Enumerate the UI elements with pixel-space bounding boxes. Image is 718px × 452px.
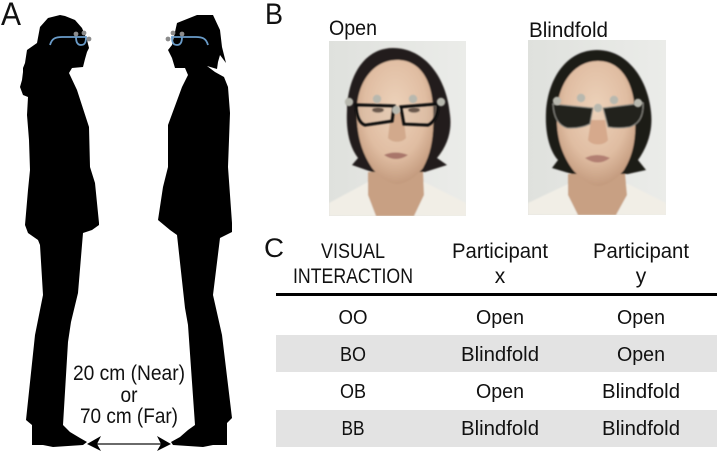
row: BB (276, 410, 717, 447)
photo: participant with blindfold glasses (528, 40, 666, 215)
table header: y (636, 265, 647, 288)
row: BO (276, 335, 717, 372)
row: BO: Open (617, 344, 665, 366)
row: OO (338, 307, 665, 329)
motion capture glasses: right participant (166, 31, 208, 45)
row: BB: Blindfold (602, 418, 680, 440)
photo: participant with clear glasses (329, 41, 466, 216)
motion capture glasses: left participant (50, 31, 91, 45)
row: OO: Open (476, 307, 524, 329)
row: OB (340, 381, 680, 403)
row: BO: Blindfold (461, 344, 539, 366)
distance label: or (120, 384, 138, 407)
distance label: 70 cm (Far) (80, 405, 178, 428)
table header: Participant (593, 240, 689, 263)
panel label C: C (264, 233, 284, 263)
caption: open: Open (329, 17, 377, 40)
double arrow: distance between participants (87, 436, 171, 451)
panel A: two standing participants (1, 0, 232, 451)
row: OO: Open (617, 307, 665, 329)
distance label (73, 362, 185, 428)
silhouette: left participant (20, 15, 99, 447)
row: BB: BB (342, 418, 364, 440)
table header: x (495, 265, 506, 288)
table header: VISUAL (321, 240, 385, 263)
row: OB: OB (340, 381, 366, 403)
table header: INTERACTION (293, 265, 413, 288)
row: OB: Blindfold (602, 381, 680, 403)
table header: Participant (452, 240, 548, 263)
row: BB: Blindfold (461, 418, 539, 440)
header rule (276, 293, 717, 296)
distance label: 20 cm (Near) (73, 362, 185, 385)
caption: blindfold: Blindfold (529, 19, 608, 42)
table header (293, 240, 689, 288)
row: BO: BO (340, 344, 366, 366)
panel B: visual conditions (265, 0, 666, 216)
panel C: interaction table (264, 233, 717, 447)
silhouette: right participant (158, 15, 232, 447)
row: OO: OO (338, 307, 368, 329)
row: OB: Open (476, 381, 524, 403)
